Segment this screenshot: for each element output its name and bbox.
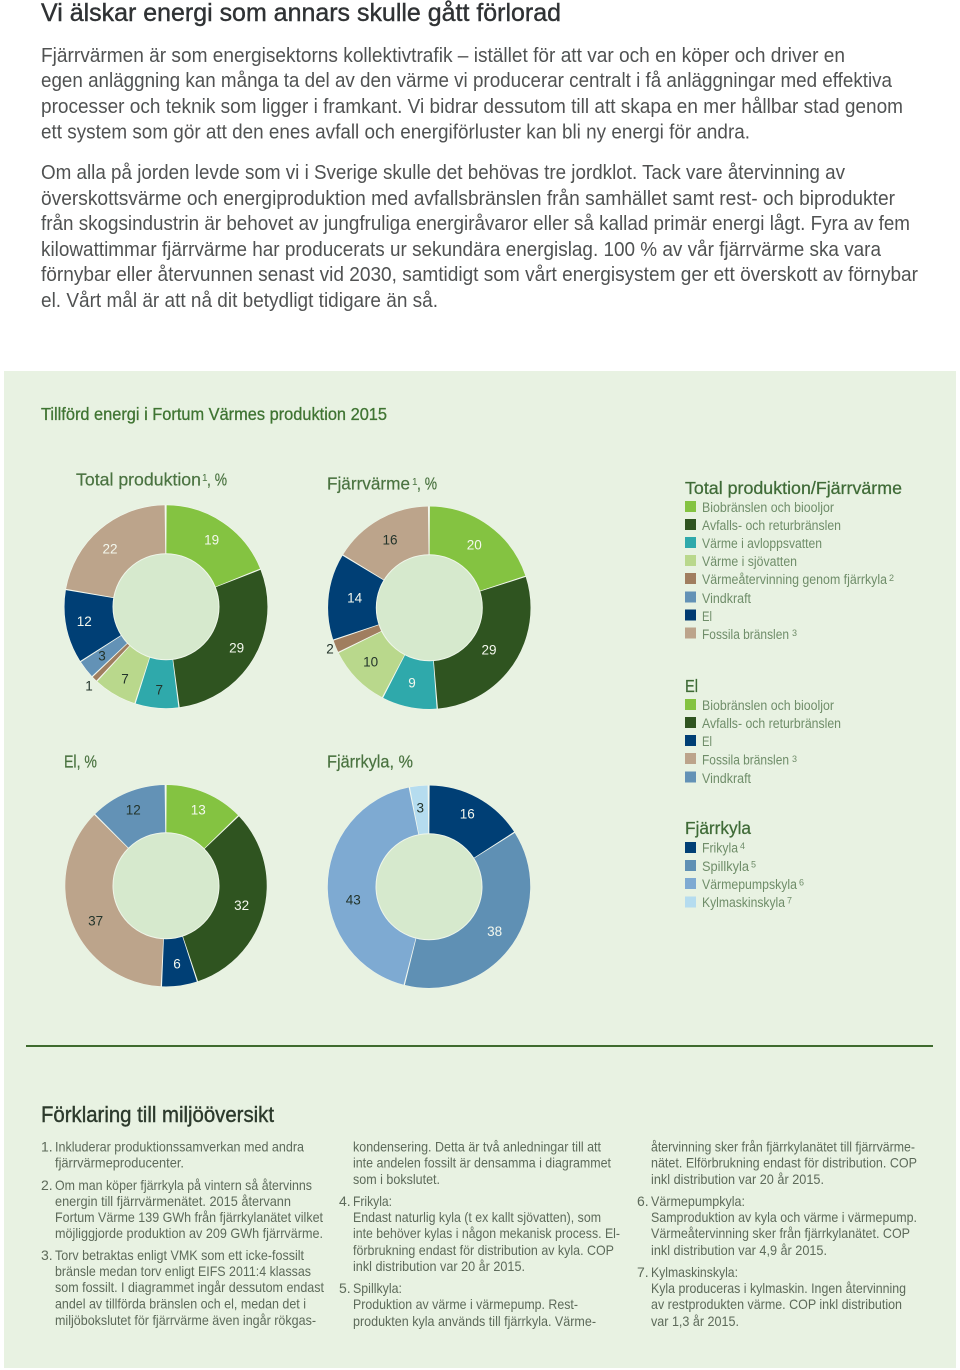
legend: Total produktion / Fjärrvärme: Värmeåtervinning genom fjärrkyla (702, 572, 887, 587)
donut chart: El: 37 (88, 914, 103, 928)
footnotes column 1: Inkluderar produktionssamverkan med andra (55, 1138, 304, 1154)
legend: Total produktion / Fjärrvärme: Avfalls- och returbränslen (702, 518, 841, 533)
footnotes column 3 (637, 1138, 917, 1329)
donut chart: Fjärrkyla: 3 (417, 800, 424, 816)
legend: El: 3 (792, 754, 797, 764)
footnotes column 2: Spillkyla: (353, 1280, 402, 1296)
footnotes column 3: 6. (637, 1193, 649, 1209)
legend: Total produktion / Fjärrvärme (685, 478, 902, 642)
legend: Total produktion / Fjärrvärme: 3 (792, 628, 797, 638)
legend: Total produktion / Fjärrvärme: Total produktion/Fjärrvärme (685, 478, 902, 498)
legend: Total produktion / Fjärrvärme: Värme i sjövatten (702, 554, 797, 569)
legend: Total produktion / Fjärrvärme: Biobränslen och biooljor (702, 500, 834, 515)
donut chart: Fjärrvärme: 10 (363, 654, 378, 670)
legend: Fjärrkyla: 5 (751, 860, 756, 870)
donut chart: Fjärrkyla: 16 (460, 806, 475, 822)
footnotes column 1: 1. (41, 1138, 53, 1154)
footnotes column 3: nätet. Elförbrukning endast för distribution. COP (651, 1154, 917, 1170)
footnotes column 3: 7. (637, 1264, 649, 1280)
footnotes column 2: produkten kyla används till fjärrkyla. Värme- (353, 1313, 596, 1329)
intro paragraph 1: egen anläggning kan många ta del av den värme vi producerar centralt i få anläggningar med effektiva (41, 69, 893, 92)
intro paragraph 2 (41, 161, 918, 312)
legend: El: El (685, 676, 698, 696)
donut chart: Fjärrvärme: 9 (408, 676, 416, 690)
footnotes column 1: andel av tillförda bränslen och el, medan det i (55, 1296, 306, 1312)
section heading: Tillförd energi i Fortum Värmes produktion 2015 (41, 404, 387, 424)
donut chart: Total produktion: 19 (204, 532, 219, 548)
legend: Fjärrkyla: 6 (799, 878, 804, 888)
intro paragraph 2: förnybar eller återvunnen senast vid 2030, samtidigt som vårt energisystem ger ett överskott av förnybar (41, 263, 918, 286)
footnotes column 3: var 1,3 år 2015. (651, 1313, 739, 1329)
legend: Total produktion / Fjärrvärme: 2 (889, 573, 894, 583)
footnotes column 1: bränsle medan torv enligt EIFS 2011:4 klassas (55, 1263, 311, 1279)
donut chart: Total produktion: 29 (229, 640, 244, 656)
footnotes column 3: återvinning sker från fjärrkylanätet till fjärrvärme- (651, 1138, 915, 1154)
donut chart: El: 12 (126, 802, 141, 818)
intro paragraph 2: kilowattimmar fjärrvärme har producerats ur sekundära energislag. 100 % av vår fjärrvärme ska vara (41, 238, 882, 261)
donut chart: Fjärrvärme (326, 506, 531, 709)
donut chart: Total produktion: 3 (98, 648, 106, 664)
legend: Total produktion / Fjärrvärme: El (702, 609, 712, 624)
chart title: El: El, % (64, 752, 97, 772)
legend: Fjärrkyla: Värmepumpskyla (702, 877, 797, 892)
legend: Fjärrkyla: 7 (787, 896, 792, 906)
footnotes column 3: Värmeåtervinning sker från fjärrkylanätet. COP (651, 1225, 910, 1241)
intro paragraph 1: Fjärrvärmen är som energisektorns kollektivtrafik – istället för att var och en köper och driver en (41, 44, 845, 67)
footnotes heading: Förklaring till miljööversikt (41, 1102, 274, 1127)
donut chart: Fjärrkyla (328, 785, 530, 988)
donut chart: El (65, 785, 267, 987)
footnotes column 3: inkl distribution var 4,9 år 2015. (651, 1242, 827, 1258)
legend: Total produktion / Fjärrvärme: Vindkraft (702, 591, 751, 606)
donut chart: Total produktion: 7 (121, 672, 129, 686)
panel: green background (4, 371, 956, 1368)
legend: Total produktion / Fjärrvärme: Värme i avloppsvatten (702, 536, 822, 551)
chart title: Fjärrvärme: 1 (412, 477, 418, 488)
legend: El: Avfalls- och returbränslen (702, 716, 841, 731)
footnotes column 1: 2. (41, 1177, 53, 1193)
intro paragraph 2: el. Vårt mål är att nå dit betydligt tidigare än så. (41, 289, 438, 312)
footnotes column 2: som i bokslutet. (353, 1171, 440, 1187)
legend: Fjärrkyla: 4 (740, 841, 745, 851)
footnotes column 2: Endast naturlig kyla (t ex kallt sjövatten), som (353, 1209, 601, 1225)
footnotes column 1: energin till fjärrvärmenätet. 2015 återvann (55, 1193, 291, 1209)
footnotes column 3: Kylmaskinskyla: (651, 1264, 738, 1280)
footnotes column 1: Torv betraktas enligt VMK som ett icke-fossilt (55, 1247, 304, 1263)
footnotes column 3: av restprodukten värme. COP inkl distribution (651, 1296, 902, 1312)
footnotes column 3: Kyla produceras i kylmaskin. Ingen återvinning (651, 1280, 906, 1296)
footnotes column 2: Frikyla: (353, 1193, 392, 1209)
footnotes column 2: förbrukning endast för distribution av kyla. COP (353, 1242, 614, 1258)
footnotes column 1: möjliggjorde produktion av 209 GWh fjärrvärme. (55, 1225, 323, 1241)
footnotes column 2: Produktion av värme i värmepump. Rest- (353, 1296, 578, 1312)
donut chart: Total produktion (64, 505, 268, 709)
intro paragraph 1 (41, 44, 903, 144)
donut chart: Fjärrvärme: 16 (382, 532, 398, 548)
chart title: Total produktion: 1 (202, 473, 208, 484)
chart title: Fjärrvärme: Fjärrvärme (327, 474, 410, 494)
footnotes column 2: 5. (339, 1280, 351, 1296)
donut chart: Fjärrvärme: 29 (481, 642, 497, 658)
legend: Fjärrkyla: Frikyla (702, 840, 738, 856)
footnotes column 1: 3. (41, 1247, 53, 1263)
footnotes column 2: 4. (339, 1193, 351, 1209)
legend: Fjärrkyla: Fjärrkyla (685, 818, 751, 838)
legend: Fjärrkyla: Kylmaskinskyla (702, 895, 785, 910)
intro paragraph 2: från skogsindustrin är behovet av jungfruliga energiråvaror eller så kallad primär energi lågt. Fyra av fem (41, 212, 910, 235)
intro paragraph 2: överskottsvärme och energiproduktion med avfallsbränslen från samhället samt rest- och biprodukter (41, 187, 895, 210)
footnotes column 2: inte behöver kylas i någon mekanisk process. El- (353, 1225, 620, 1241)
donut chart: Total produktion: 12 (77, 614, 92, 629)
donut chart: Fjärrkyla: 43 (346, 892, 361, 908)
legend: El: Biobränslen och biooljor (702, 698, 834, 713)
legend: Fjärrkyla: Spillkyla (702, 859, 749, 874)
donut chart: El: 32 (234, 898, 249, 913)
donut chart: Fjärrkyla: 38 (487, 924, 502, 939)
footnotes column 1: Fortum Värme 139 GWh från fjärrkylanätet vilket (55, 1209, 323, 1225)
donut chart: Total produktion: 7 (156, 682, 163, 698)
intro paragraph 2: Om alla på jorden levde som vi i Sverige skulle det behövas tre jordklot. Tack vare återvinning av (41, 161, 846, 184)
chart title: Total produktion: Total produktion (76, 470, 201, 490)
intro paragraph 1: processer och teknik som ligger i framkant. Vi bidrar dessutom till att skapa en mer hållbar stad genom (41, 95, 903, 118)
footnotes column 1: fjärrvärmeproducenter. (55, 1154, 184, 1170)
footnotes column 2: inkl distribution var 20 år 2015. (353, 1258, 525, 1274)
chart title: Fjärrvärme: , % (417, 474, 437, 494)
footnotes column 2: kondensering. Detta är två anledningar till att (353, 1138, 601, 1154)
donut chart: El: 13 (191, 802, 206, 818)
donut chart: El: 6 (173, 956, 181, 972)
donut chart: Total produktion: 1 (85, 678, 93, 694)
legend: El: Fossila bränslen (702, 752, 789, 768)
intro paragraph 1: ett system som gör att den enes avfall och energiförluster kan bli ny energi för andra. (41, 120, 750, 144)
footnotes column 2: inte andelen fossilt är densamma i diagrammet (353, 1154, 611, 1170)
legend: Fjärrkyla (685, 818, 804, 910)
legend: El: El (702, 734, 712, 749)
donut chart: Fjärrvärme: 2 (326, 642, 334, 656)
footnotes column 3: inkl distribution var 20 år 2015. (651, 1171, 824, 1187)
donut chart: Fjärrvärme: 20 (467, 538, 482, 552)
footnotes column 2 (339, 1138, 620, 1329)
footnotes column 1: som fossilt. I diagrammet ingår dessutom endast (55, 1279, 324, 1295)
donut chart: Total produktion: 22 (102, 542, 118, 556)
donut chart: Fjärrvärme: 14 (347, 590, 363, 606)
footnotes column 1 (41, 1138, 324, 1328)
chart title: Fjärrkyla: Fjärrkyla, % (327, 752, 413, 772)
legend: El: Vindkraft (702, 771, 751, 786)
footnotes column 3: Samproduktion av kyla och värme i värmepump. (651, 1209, 917, 1225)
legend: El (685, 676, 841, 786)
chart title: Total produktion: , % (207, 470, 227, 490)
footnotes column 1: Om man köper fjärrkyla på vintern så återvinns (55, 1177, 312, 1193)
footnotes column 1: miljöbokslutet för fjärrvärme även ingår rökgas- (55, 1312, 316, 1328)
legend: Total produktion / Fjärrvärme: Fossila bränslen (702, 627, 789, 642)
footnotes column 3: Värmepumpkyla: (651, 1193, 745, 1209)
